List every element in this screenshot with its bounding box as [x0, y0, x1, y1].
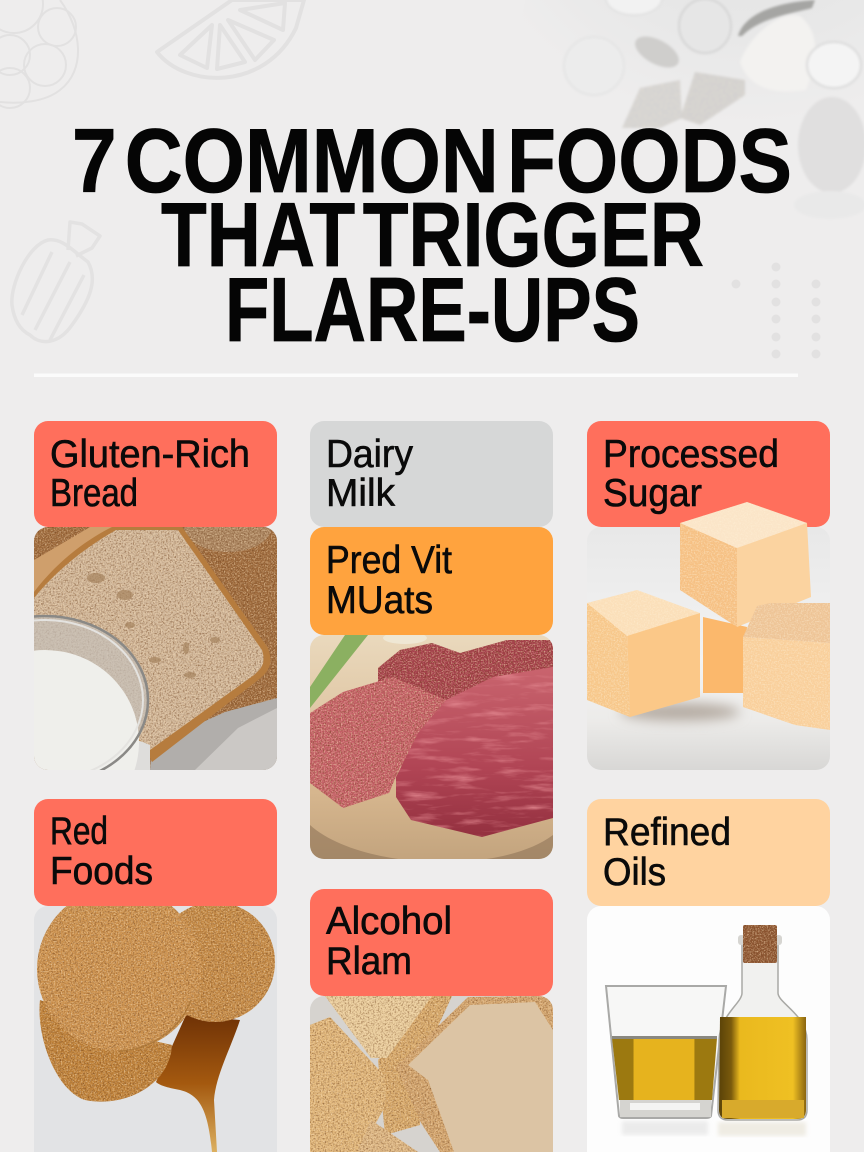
label: red foods: Foods [50, 850, 153, 893]
label: gluten-rich bread: Bread [50, 472, 138, 515]
panel: dairy milk label: Dairy [326, 433, 413, 476]
decorative line icon: citrus wedge [157, 0, 304, 78]
panel: alcohol rlam [310, 889, 553, 1152]
panel: refined oils [587, 799, 830, 1152]
title: FLARE-UPS [225, 260, 640, 361]
label: gluten-rich bread: Gluten-Rich [50, 433, 250, 476]
label: processed sugar [587, 421, 830, 527]
decorative line icon: bell pepper [12, 222, 100, 342]
photo: bread and milk [34, 527, 277, 770]
panel: dairy milk label: Milk [326, 472, 395, 515]
decorative dot pattern [732, 262, 820, 358]
label: processed sugar: Sugar [603, 472, 702, 515]
photo background [587, 696, 830, 770]
title [72, 111, 792, 361]
label: refined oils: Refined [603, 811, 731, 854]
photo: raw red meat [310, 632, 553, 862]
title: THAT TRIGGER [161, 185, 704, 286]
label: alcohol rlam: Rlam [326, 940, 412, 983]
label: pred vit muats [310, 527, 553, 635]
photo: cookies and syrup [34, 887, 277, 1152]
icon: glass of oil [606, 986, 726, 1118]
panel: dairy milk label [310, 421, 553, 527]
panel: red foods [34, 799, 277, 1152]
icon: sugar cubes [587, 502, 830, 730]
label: alcohol rlam [310, 889, 553, 996]
label: red foods: Red [50, 810, 108, 853]
photo: crackers and toast [310, 996, 553, 1152]
label: red foods [34, 799, 277, 906]
decorative grey food photo, top right [520, 0, 864, 219]
label: pred vit muats: MUats [326, 579, 433, 622]
panel: processed meats [310, 527, 553, 862]
label: processed sugar: Processed [603, 433, 779, 476]
photo: oil glass and bottle [587, 906, 830, 1152]
label: refined oils [587, 799, 830, 906]
label: pred vit muats: Pred Vit [326, 539, 452, 582]
icon: bottle of oil [718, 925, 807, 1120]
label: refined oils: Oils [603, 851, 666, 894]
panel: gluten-rich bread [34, 421, 277, 770]
panel: processed sugar [587, 421, 830, 770]
decorative line icon: fruit basket [0, 0, 78, 108]
label: gluten-rich bread [34, 421, 277, 527]
label: alcohol rlam: Alcohol [326, 900, 452, 943]
